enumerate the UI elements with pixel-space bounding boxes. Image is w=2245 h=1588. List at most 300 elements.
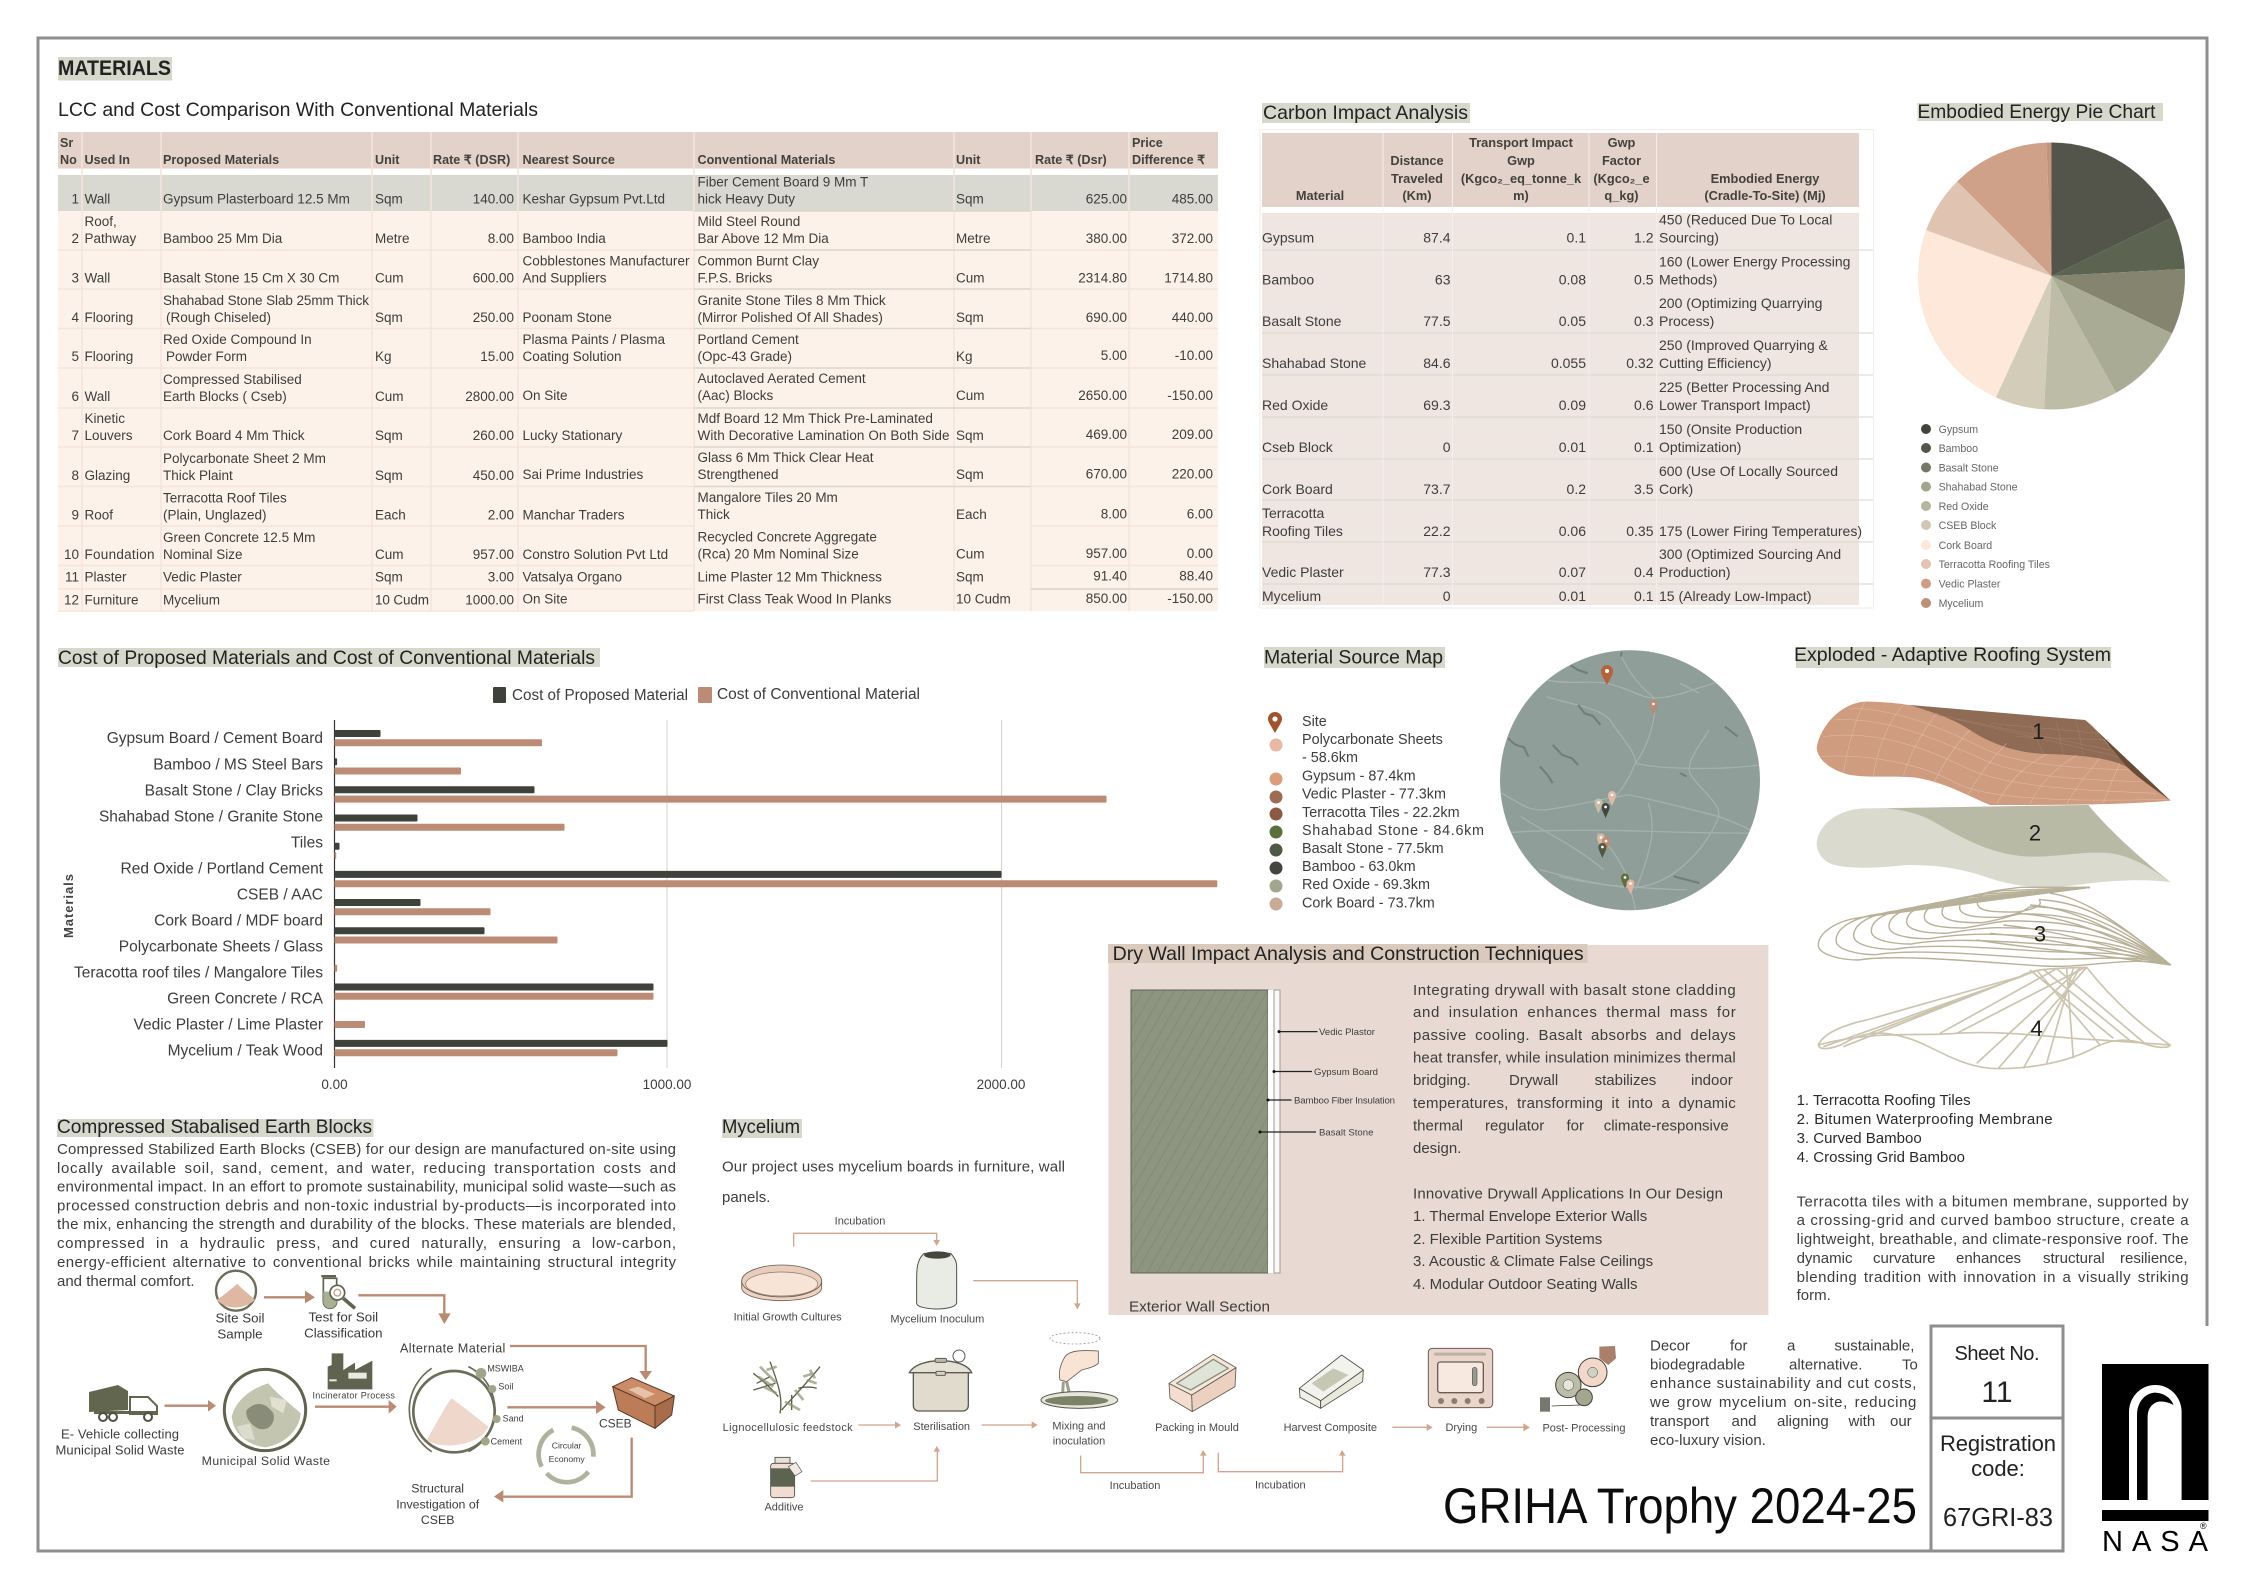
row 5: Kg: [375, 349, 392, 364]
roof layer list: 2. Bitumen Waterproofing Membrane: [1797, 1111, 2053, 1128]
row 2: Bar Above 12 Mm Dia: [698, 231, 829, 246]
row 3: Wall: [84, 270, 110, 286]
row 1: Wall: [84, 192, 110, 206]
exploded roof diagram: [1817, 702, 2171, 1069]
mixing label: inoculation: [1053, 1435, 1105, 1447]
row 3: Common Burnt Clay: [698, 254, 819, 268]
mycelium decor paragraph: with: [1848, 1413, 1875, 1430]
E-vehicle label: Municipal Solid Waste: [56, 1442, 184, 1458]
category labels: Polycarbonate Sheets / Glass: [119, 938, 323, 956]
category labels: Bamboo / MS Steel Bars: [153, 756, 323, 774]
pie chart legend: [1921, 424, 2050, 610]
table header: Rate ₹ (DSR): [433, 153, 510, 167]
carbon rows: 0.2: [1567, 481, 1586, 497]
category labels: Vedic Plaster / Lime Plaster: [133, 1016, 323, 1034]
row 7: 7: [71, 428, 79, 443]
row 8: [71, 450, 1213, 483]
row 11: Lime Plaster 12 Mm Thickness: [698, 570, 882, 584]
carbon rows: Shahabad Stone: [1262, 355, 1367, 371]
mycelium inoculum label: Mycelium Inoculum: [890, 1313, 984, 1325]
row 12: 1000.00: [465, 592, 514, 608]
roof description: Terracotta tiles with a bitumen membrane, supported by: [1797, 1193, 2189, 1210]
roof layer list: 3. Curved Bamboo: [1797, 1130, 1922, 1147]
carbon rows: 0.07: [1559, 564, 1586, 580]
CSEB paragraph: processed construction debris and non-toxic industrial by-products—is incorporated into: [57, 1198, 676, 1215]
row 5: Plasma Paints / Plasma: [522, 332, 666, 347]
row 6: [71, 371, 1213, 404]
mycelium decor paragraph: and: [1732, 1413, 1757, 1430]
exterior wall section drawing: Gypsum Board: [1314, 1067, 1378, 1078]
table header: Difference ₹: [1132, 153, 1206, 167]
roof description: lightweight, breathable, and climate-responsive roof. The: [1797, 1231, 2189, 1248]
carbon rows: Red Oxide: [1262, 397, 1328, 413]
dry wall paragraph: [1413, 982, 1736, 1157]
chart legend: Cost of Proposed Material: [512, 687, 688, 704]
row 12: First Class Teak Wood In Planks: [698, 592, 892, 606]
row 2: 380.00: [1086, 231, 1127, 246]
carbon table header: Transport Impact: [1469, 135, 1574, 150]
row 7: 260.00: [473, 428, 514, 443]
carbon table header: Gwp: [1507, 153, 1535, 168]
row 3: Cum: [375, 270, 404, 286]
row 12: Mycelium: [163, 592, 220, 608]
row 5: Portland Cement: [698, 332, 799, 347]
carbon rows: 450 (Reduced Due To Local: [1659, 212, 1832, 228]
row 7: 209.00: [1172, 427, 1213, 442]
registration code block: Registration: [1940, 1431, 2056, 1456]
E-vehicle label: E- Vehicle collecting: [61, 1426, 179, 1442]
row 11: Vatsalya Organo: [522, 570, 622, 584]
category labels: Gypsum Board / Cement Board: [107, 730, 323, 747]
carbon rows: 63: [1435, 272, 1451, 288]
mixing label: Mixing and: [1052, 1420, 1106, 1432]
row 8: Sqm: [375, 468, 403, 483]
registration code block: 67GRI-83: [1943, 1502, 2053, 1532]
heading: material source map: Material Source Map: [1264, 646, 1443, 668]
dry wall heading: Dry Wall Impact Analysis and Construction Techniques: [1113, 943, 1584, 965]
carbon table header: Gwp: [1608, 135, 1636, 150]
carbon rows: 150 (Onsite Production: [1659, 421, 1802, 437]
row 6: Cum: [956, 388, 985, 403]
map legend: Polycarbonate Sheets: [1302, 732, 1443, 748]
row 7: Cork Board 4 Mm Thick: [163, 428, 305, 443]
map legend: [1268, 712, 1484, 912]
exterior wall section drawing: Vedic Plastor: [1319, 1027, 1376, 1038]
category labels: Teracotta roof tiles / Mangalore Tiles: [74, 964, 323, 982]
carbon rows: Lower Transport Impact): [1659, 397, 1811, 413]
row 3: 3: [71, 270, 79, 286]
mycelium paragraph: panels.: [722, 1189, 770, 1206]
arrow: additive to sterilisation: [811, 1446, 940, 1481]
row 5: 15.00: [480, 349, 514, 364]
category labels: CSEB / AAC: [237, 886, 323, 904]
heading: embodied energy pie chart: Embodied Energy Pie Chart: [1918, 101, 2156, 123]
arrow: feedstock to sterilisation: [858, 1421, 901, 1429]
carbon rows: 77.5: [1423, 313, 1451, 329]
map legend: Red Oxide - 69.3km: [1302, 877, 1430, 893]
CSEB paragraph: energy-efficient alternative to conventional bricks while maintaining structural integrity: [57, 1254, 676, 1271]
row 4: Sqm: [956, 310, 984, 325]
carbon rows: 0: [1443, 439, 1451, 455]
mix icon: [409, 1367, 501, 1452]
row 12: 12: [64, 592, 79, 608]
test label: Classification: [304, 1326, 383, 1341]
row 10: (Rca) 20 Mm Nominal Size: [698, 546, 859, 562]
row 11: [65, 568, 1213, 584]
row 7: Mdf Board 12 Mm Thick Pre-Laminated: [698, 411, 933, 426]
carbon rows: 73.7: [1423, 481, 1451, 497]
heading: compressed stabilised earth blocks: Compressed Stabalised Earth Blocks: [57, 1116, 372, 1138]
arrow: inoculum to mixing: [973, 1281, 1081, 1309]
row 10: Cum: [956, 546, 985, 562]
arrow: test to alternate material: [358, 1295, 451, 1324]
map legend: Site: [1302, 714, 1327, 730]
factory icon: [328, 1353, 372, 1389]
row 9: Thick: [698, 507, 730, 522]
exterior wall section drawing: Basalt Stone: [1319, 1128, 1373, 1138]
row 12: 850.00: [1086, 591, 1127, 606]
row 4: Shahabad Stone Slab 25mm Thick: [163, 293, 369, 308]
incinerator label: Incinerator Process: [312, 1390, 395, 1400]
row 1: 1: [71, 192, 79, 206]
row 5: Red Oxide Compound In: [163, 332, 312, 347]
map legend: Shahabad Stone - 84.6km: [1302, 823, 1484, 839]
carbon table header: Embodied Energy: [1711, 171, 1820, 186]
mycelium decor paragraph: we grow mycelium on-site, reducing: [1649, 1394, 1916, 1411]
carbon rows: 84.6: [1423, 355, 1451, 371]
row 2: Metre: [375, 231, 410, 246]
carbon rows: 0.01: [1559, 588, 1586, 604]
layer numbers: 2: [2029, 821, 2041, 846]
pie chart legend: Shahabad Stone: [1939, 482, 2018, 494]
bottle icon: [771, 1457, 802, 1498]
table header: Nearest Source: [522, 153, 615, 167]
pie chart legend: Vedic Plaster: [1939, 579, 2001, 591]
circular economy icon: Circular: [552, 1441, 582, 1451]
carbon rows: 600 (Use Of Locally Sourced: [1659, 463, 1838, 479]
mycelium decor paragraph: for: [1730, 1338, 1748, 1355]
axis labels: 2000.00: [977, 1077, 1025, 1092]
row 4: Granite Stone Tiles 8 Mm Thick: [698, 293, 886, 308]
mycelium decor paragraph: enhance sustainability and cut costs,: [1650, 1375, 1916, 1392]
E-vehicle label: [56, 1426, 184, 1458]
row 4: 690.00: [1086, 310, 1127, 325]
pie chart legend: Red Oxide: [1939, 501, 1989, 513]
row 11: 88.40: [1179, 568, 1213, 584]
table header: No: [60, 153, 77, 167]
dry wall applications list: 2. Flexible Partition Systems: [1413, 1231, 1602, 1248]
carbon rows: Vedic Plaster: [1262, 564, 1344, 580]
incubation bracket top: [794, 1215, 940, 1247]
row 2: [71, 214, 1213, 246]
structural investigation label: Investigation of: [396, 1497, 480, 1511]
arrow: CSEB to structural investigation: [494, 1438, 632, 1502]
dry wall applications list: 1. Thermal Envelope Exterior Walls: [1413, 1208, 1647, 1225]
roof description: a crossing-grid and curved bamboo structure, create a: [1797, 1212, 2189, 1229]
roof description: [1797, 1193, 2189, 1304]
row 5: -10.00: [1175, 348, 1213, 363]
carbon table header: Distance: [1390, 153, 1444, 168]
row 8: 8: [71, 468, 79, 483]
CSEB paragraph: compressed in a hydraulic press, and cured naturally, ensuring a low-carbon,: [57, 1235, 676, 1252]
petri dish icon: [742, 1265, 822, 1301]
row 6: 2650.00: [1078, 388, 1127, 403]
CSEB paragraph: environmental impact. In an effort to promote sustainability, municipal solid waste—such as: [57, 1179, 676, 1196]
roof layer list: 1. Terracotta Roofing Tiles: [1797, 1092, 1971, 1109]
drying label: Drying: [1445, 1422, 1477, 1434]
arrow: waste to mix: [315, 1400, 397, 1414]
row 4: 4: [71, 310, 79, 325]
mycelium decor paragraph: eco-luxury vision.: [1650, 1432, 1766, 1449]
row 4: Poonam Stone: [522, 310, 612, 325]
CSEB paragraph: and thermal comfort.: [57, 1273, 195, 1290]
row 6: Autoclaved Aerated Cement: [698, 371, 866, 386]
table header: Rate ₹ (Dsr): [1035, 153, 1107, 167]
carbon rows: 0: [1443, 588, 1451, 604]
sheet number block: [1954, 1343, 2040, 1409]
row 8: Sai Prime Industries: [522, 467, 644, 482]
row 8: 450.00: [473, 468, 514, 483]
mycelium decor paragraph: [1649, 1338, 1918, 1449]
dry wall paragraph: regulator: [1485, 1118, 1544, 1134]
jar icon: [917, 1251, 957, 1309]
carbon table body: [1262, 133, 1873, 605]
pie chart legend: Bamboo: [1939, 443, 1978, 455]
row 10: 0.00: [1187, 546, 1213, 561]
row 10: Recycled Concrete Aggregate: [698, 530, 877, 544]
map legend: Bamboo - 63.0km: [1302, 859, 1416, 875]
carbon rows: Terracotta: [1262, 505, 1324, 521]
lignocellulosic plant icon: [753, 1362, 820, 1413]
map legend: Cork Board - 73.7km: [1302, 896, 1435, 912]
row 3: And Suppliers: [522, 270, 607, 286]
row 10: 10: [64, 547, 79, 562]
dry wall paragraph: Integrating drywall with basalt stone cladding: [1413, 982, 1736, 999]
carbon table header: Traveled: [1391, 171, 1443, 186]
row 10: Foundation: [84, 547, 154, 562]
row 1: Keshar Gypsum Pvt.Ltd: [522, 192, 665, 206]
arrow: drying to post-processing: [1487, 1423, 1530, 1431]
category labels: Basalt Stone / Clay Bricks: [145, 782, 323, 800]
row 8: Polycarbonate Sheet 2 Mm: [163, 451, 326, 466]
row 2: 372.00: [1172, 231, 1213, 246]
row 5: Flooring: [84, 349, 133, 364]
row 4: (Rough Chiseled): [166, 310, 271, 325]
table header: Used In: [84, 153, 130, 167]
mycelium paragraph: Our project uses mycelium boards in furniture, wall: [722, 1159, 1065, 1176]
row 9: Mangalore Tiles 20 Mm: [698, 490, 838, 505]
mycelium decor paragraph: sustainable,: [1834, 1338, 1914, 1355]
incubation bracket top: Incubation: [835, 1215, 885, 1227]
carbon table header: m): [1513, 188, 1529, 203]
row 4: 440.00: [1172, 310, 1213, 325]
dry wall paragraph: Drywall: [1509, 1072, 1558, 1089]
logo: NASA: NASA: [2102, 1526, 2209, 1558]
table header: [58, 132, 1218, 168]
incubation bracket: [1081, 1450, 1207, 1492]
carbon rows: 0.32: [1626, 355, 1654, 371]
row 8: Strengthened: [698, 467, 779, 482]
row 7: Sqm: [375, 428, 403, 443]
CSEB label: CSEB: [599, 1416, 632, 1430]
circular source map: [1500, 650, 1760, 910]
row 6: 6: [71, 389, 79, 404]
table header: Unit: [375, 153, 400, 167]
carbon rows: Mycelium: [1262, 588, 1321, 604]
carbon rows: Gypsum: [1262, 230, 1314, 246]
bars: [334, 730, 1217, 1056]
additive label: Additive: [764, 1502, 804, 1514]
table body background: [58, 132, 1218, 611]
carbon table header: Factor: [1602, 153, 1641, 168]
row 7: 469.00: [1086, 427, 1127, 442]
pie chart legend: Terracotta Roofing Tiles: [1939, 559, 2050, 571]
row 7: Louvers: [84, 428, 133, 443]
chart legend: [493, 686, 920, 704]
row 1: 485.00: [1172, 192, 1213, 206]
category labels: Mycelium / Teak Wood: [168, 1042, 323, 1060]
layer 4: crossing grid bamboo: [1818, 967, 2170, 1069]
row 5: [71, 332, 1213, 364]
mix ingredient labels: MSWIBA: [487, 1363, 524, 1373]
dry wall paragraph: for: [1566, 1118, 1584, 1134]
row 1: hick Heavy Duty: [698, 192, 795, 206]
heading: exploded roofing system: Exploded - Adaptive Roofing System: [1794, 644, 2111, 666]
bar chart: cost comparison: [61, 720, 1217, 1092]
axis labels: [321, 1077, 1025, 1092]
row 9: Manchar Traders: [522, 508, 625, 522]
row 11: 3.00: [488, 570, 514, 584]
dry wall paragraph: stabilizes: [1595, 1072, 1656, 1089]
row 7: Lucky Stationary: [522, 428, 623, 443]
alternate material label: Alternate Material: [400, 1342, 505, 1356]
mycelium process diagram: [723, 1215, 1207, 1514]
row 2: Mild Steel Round: [698, 214, 800, 229]
row 8: 670.00: [1086, 466, 1127, 482]
heading: cost of materials chart: Cost of Proposed Materials and Cost of Conventional Materials: [58, 647, 595, 669]
harvest label: Harvest Composite: [1284, 1422, 1377, 1434]
row 10: Cum: [375, 547, 404, 562]
row 12: -150.00: [1167, 591, 1213, 606]
carbon rows: Methods): [1659, 272, 1717, 288]
dry wall paragraph: bridging.: [1413, 1072, 1471, 1089]
carbon rows: 0.3: [1634, 313, 1654, 329]
row 5: 5.00: [1101, 348, 1127, 363]
carbon rows: 160 (Lower Energy Processing: [1659, 254, 1850, 270]
registration code block: code:: [1971, 1456, 2025, 1481]
row 2: Metre: [956, 231, 991, 246]
roof description: blending tradition with innovation in a visually striking: [1797, 1269, 2189, 1286]
test label: [304, 1310, 383, 1341]
table header: Price: [1132, 136, 1163, 150]
category labels: Green Concrete / RCA: [167, 990, 324, 1008]
dry wall paragraph: passive cooling. Basalt absorbs and delays: [1413, 1027, 1736, 1044]
row 12: Furniture: [84, 592, 139, 608]
roof description: curvature: [1873, 1250, 1936, 1267]
row 1: [71, 174, 1213, 206]
row 3: [71, 254, 1213, 286]
initial growth cultures label: Initial Growth Cultures: [734, 1312, 842, 1324]
heading: carbon impact analysis: Carbon Impact Analysis: [1263, 102, 1468, 124]
layer numbers: 1: [2032, 719, 2044, 744]
row 9: Each: [375, 508, 406, 522]
pie chart legend: Mycelium: [1939, 598, 1984, 610]
arrow: harvest to drying: [1392, 1424, 1433, 1431]
carbon rows: 1.2: [1634, 230, 1654, 246]
row 6: Wall: [84, 389, 110, 404]
table: carbon impact analysis: [1260, 130, 1874, 608]
roof description: enhances: [1956, 1250, 2021, 1267]
map legend: Terracotta Tiles - 22.2km: [1302, 805, 1460, 821]
layer numbers: 3: [2034, 922, 2046, 947]
layer 3: curved bamboo: [1818, 887, 2171, 966]
row 6: On Site: [522, 388, 568, 403]
row 12: 10 Cudm: [956, 592, 1011, 606]
wall section caption: Exterior Wall Section: [1129, 1299, 1270, 1316]
category labels: Red Oxide / Portland Cement: [121, 860, 324, 878]
sheet number block: Sheet No.: [1954, 1343, 2040, 1365]
pie chart legend: Cork Board: [1939, 540, 1992, 552]
row 10: Nominal Size: [163, 547, 243, 562]
roof description: structural: [2043, 1250, 2105, 1267]
row 8: Thick Plaint: [163, 468, 233, 483]
carbon table header: Material: [1296, 188, 1344, 203]
layer numbers: 4: [2031, 1016, 2043, 1041]
pie chart legend: CSEB Block: [1939, 520, 1997, 532]
carbon table header: (Km): [1402, 188, 1432, 203]
arrow: mix to CSEB: [507, 1401, 606, 1414]
row 9: [71, 490, 1213, 522]
row 10: 957.00: [473, 547, 514, 562]
row 12: [64, 591, 1213, 608]
row 2: Pathway: [84, 231, 137, 246]
row 12: On Site: [522, 592, 568, 606]
logo: NASA: ®: [2200, 1521, 2207, 1531]
row 9: 8.00: [1101, 506, 1127, 522]
carbon rows: 0.1: [1567, 230, 1586, 246]
carbon rows: 0.05: [1559, 313, 1586, 329]
dry wall applications list: [1413, 1186, 1723, 1293]
row 4: [71, 293, 1213, 325]
row 7: Kinetic: [84, 411, 125, 426]
row 6: (Aac) Blocks: [698, 388, 774, 403]
competition title: GRIHA Trophy 2024-25: [1443, 1478, 1917, 1534]
mycelium decor paragraph: biodegradable: [1650, 1357, 1745, 1374]
circular economy icon: [539, 1428, 593, 1482]
carbon rows: 0.08: [1559, 272, 1586, 288]
carbon rows: 69.3: [1423, 397, 1451, 413]
E-vehicle icon: [89, 1385, 158, 1421]
logo: NASA: [2102, 1364, 2209, 1558]
row 11: Sqm: [375, 570, 403, 584]
row 11: Sqm: [956, 570, 984, 584]
dry wall paragraph: heat transfer, while insulation minimizes thermal: [1413, 1050, 1736, 1067]
row 9: (Plain, Unglazed): [163, 508, 267, 522]
panel: dry wall impact analysis: [1108, 943, 1768, 1316]
heading: materials: MATERIALS: [58, 57, 171, 80]
registration code block: [1940, 1431, 2056, 1532]
structural investigation label: Structural: [411, 1481, 464, 1495]
row 4: Flooring: [84, 310, 133, 325]
category labels: Tiles: [291, 834, 323, 852]
dry wall paragraph: design.: [1413, 1140, 1461, 1157]
carbon rows: Production): [1659, 564, 1731, 580]
table header: Proposed Materials: [163, 153, 279, 167]
row 2: Bamboo 25 Mm Dia: [163, 231, 283, 246]
test label: Test for Soil: [309, 1310, 378, 1325]
row 6: -150.00: [1167, 388, 1213, 403]
structural investigation label: [396, 1481, 480, 1527]
